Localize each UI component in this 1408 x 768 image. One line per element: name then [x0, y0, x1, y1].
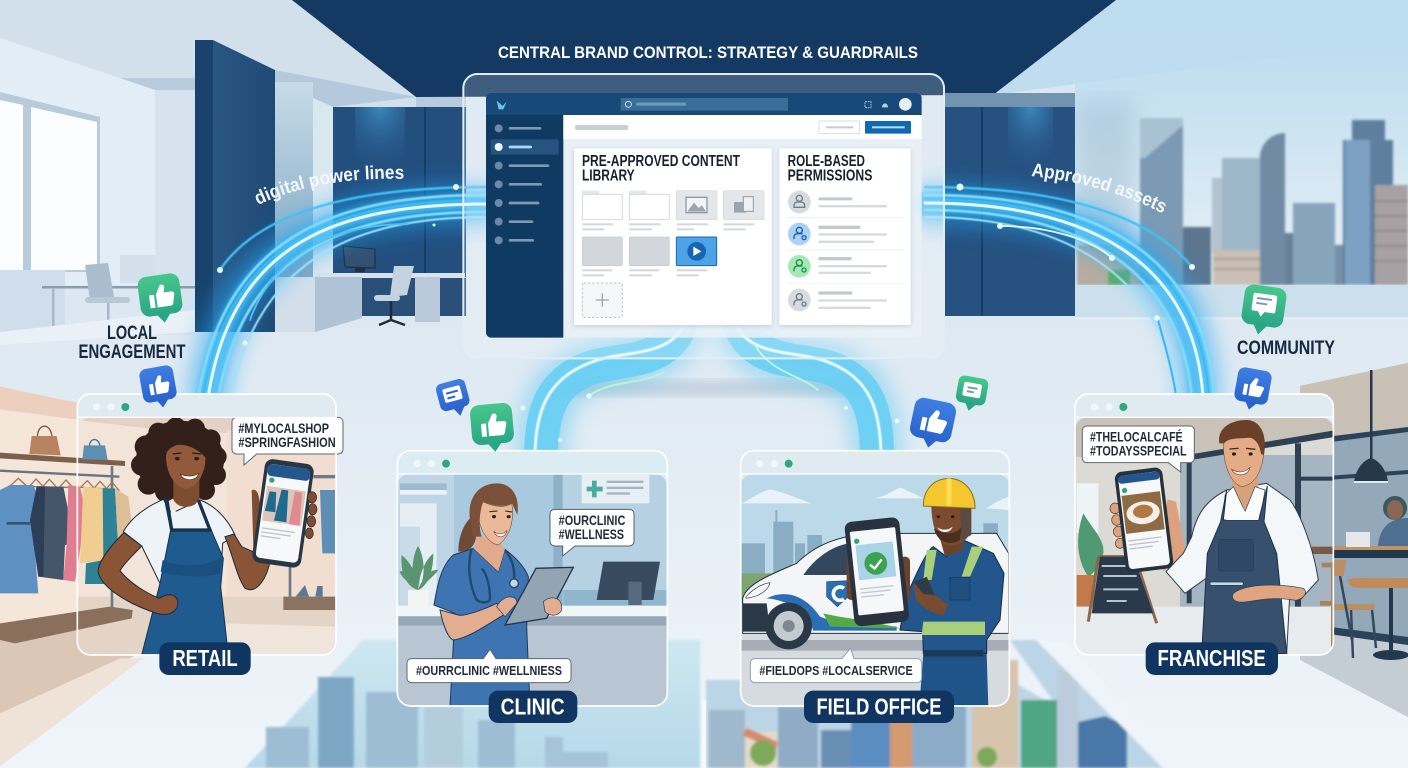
clinic hashtag bubble: #WELLNESS [559, 527, 624, 542]
clinic label [489, 691, 577, 723]
franchise hashtag bubble: #TODAYSSPECIAL [1090, 443, 1187, 458]
retail hashtag bubble [232, 417, 343, 465]
field office worker [847, 478, 1004, 707]
retail woman [98, 417, 270, 655]
digital power lines: centre [520, 325, 900, 458]
panel: central dashboard [463, 74, 944, 358]
field office hashtag bubble: #FIELDOPS #LOCALSERVICE [759, 663, 913, 678]
bottom city right [706, 640, 1180, 768]
bottom city left [245, 640, 700, 768]
franchise scene [1076, 418, 1332, 648]
icon: green thumbs up (local engagement) [136, 272, 185, 326]
field office label [804, 691, 954, 723]
back office desk and chair [275, 246, 466, 332]
franchise hashtag bubble: #THELOCALCAFÉ [1090, 429, 1183, 444]
field office scene [730, 474, 1017, 707]
franchise hashtag bubble [1082, 426, 1194, 472]
title: CENTRAL BRAND CONTROL: STRATEGY & GUARDRAILS [498, 43, 918, 62]
franchise man [1163, 420, 1318, 653]
field office hashtag bubble [750, 648, 922, 683]
label: local engagement [78, 322, 186, 363]
dashboard toolbar [563, 115, 922, 139]
clinic nurse [434, 483, 573, 707]
cafe background [1300, 363, 1408, 717]
label: approved assets: Approved assets [1032, 164, 1166, 212]
retail hashtag bubble: #MYLOCALSHOP [238, 421, 329, 436]
retail phone [251, 458, 317, 569]
label: local engagement: ENGAGEMENT [78, 341, 186, 363]
retail shop background [0, 387, 143, 767]
label: community: COMMUNITY [1237, 337, 1335, 359]
panel: retail [76, 393, 344, 675]
panel: role-based permissions [779, 148, 911, 325]
icon: blue thumbs up (retail) [138, 364, 179, 411]
retail hashtag bubble: #SPRINGFASHION [238, 435, 336, 450]
panel: field office [730, 451, 1017, 723]
digital power lines: left [198, 184, 488, 398]
franchise label: FRANCHISE [1157, 645, 1266, 671]
field office window dots [756, 460, 793, 468]
panel: pre-approved content library: LIBRARY [582, 168, 635, 185]
icon: blue thumbs up (franchise) [1232, 366, 1273, 413]
panel: clinic [390, 451, 677, 723]
icon: green thumbs up (clinic) [469, 402, 515, 454]
franchise phone [1110, 467, 1174, 574]
panel: franchise [1060, 394, 1347, 675]
retail label: RETAIL [172, 645, 238, 671]
dashboard sidebar [486, 115, 563, 338]
retail window dots [93, 403, 129, 411]
dashboard header bar [486, 93, 922, 115]
icon: green chat (community) [1239, 283, 1288, 338]
panel: role-based permissions: PERMISSIONS [788, 168, 872, 185]
clinic window dots [413, 460, 450, 468]
icon: blue thumbs up (field office) [907, 396, 958, 452]
label: digital power lines: digital power lines [256, 165, 404, 204]
clinic lower hashtag bubble [407, 649, 571, 683]
field office label: FIELD OFFICE [816, 694, 941, 720]
digital power lines: right [925, 184, 1214, 398]
clinic scene [390, 474, 677, 707]
skyline right [1075, 100, 1408, 300]
panel: pre-approved content library [574, 148, 772, 325]
franchise label [1146, 642, 1278, 675]
retail label [159, 642, 251, 675]
panel: role-based permissions: ROLE-BASED [788, 153, 865, 170]
clinic lower hashtag bubble: #OURRCLINIC #WELLNIESS [416, 663, 562, 678]
label: local engagement: LOCAL [107, 322, 157, 344]
retail scene [78, 418, 336, 654]
field office phone [844, 517, 910, 627]
icon: blue chat (clinic) [435, 378, 473, 420]
clinic hashtag bubble: #OURCLINIC [559, 513, 625, 528]
clinic hashtag bubble [550, 509, 634, 556]
panel: pre-approved content library: PRE-APPROVED CONTENT [582, 153, 740, 170]
clinic label: CLINIC [501, 694, 565, 720]
franchise window dots [1091, 403, 1127, 411]
icon: green chat (field office) [954, 375, 989, 413]
